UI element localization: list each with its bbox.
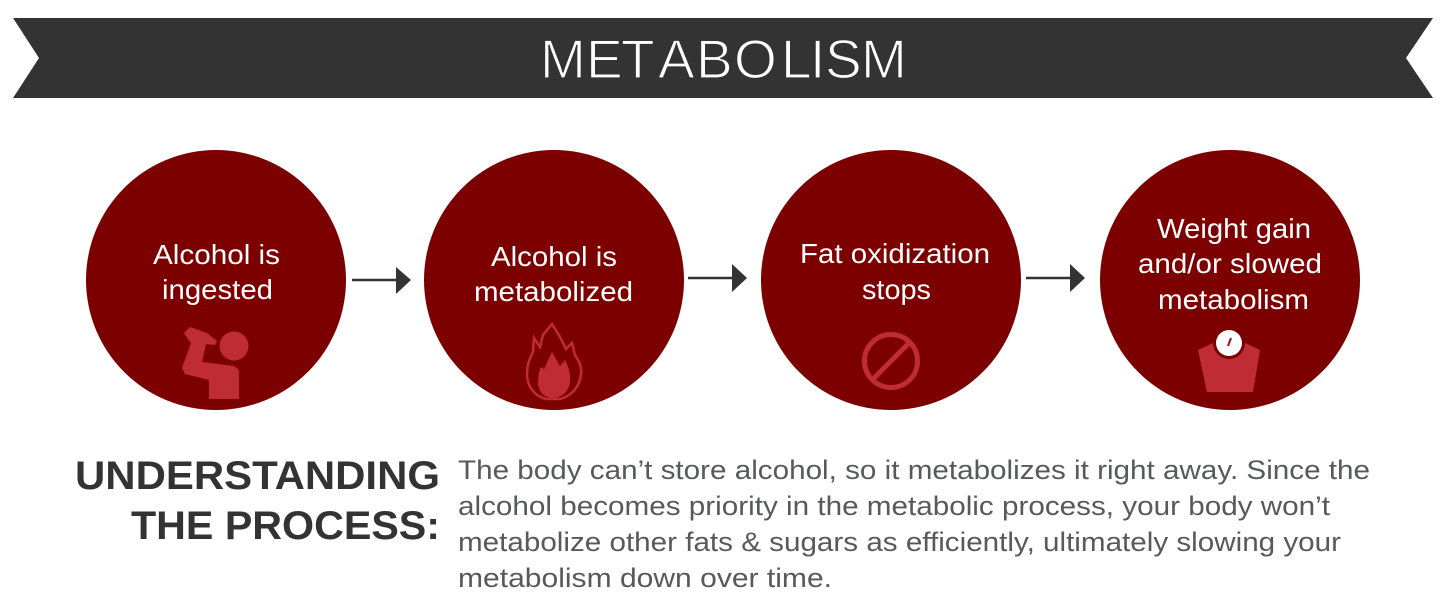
icon: person drinking [182,327,248,399]
explanation text: The body can’t store alcohol, so it metabolizes it right away. Since the [458,455,1370,485]
explanation text [458,455,1370,593]
step 2: alcohol is metabolized: Alcohol is [491,241,617,272]
explanation text: alcohol becomes priority in the metabolic process, your body won’t [458,491,1331,521]
arrow 2 [688,264,747,292]
icon: flame [527,324,581,399]
arrow 1 [352,267,411,294]
explanation text: metabolize other fats & sugars as efficiently, ultimately slowing your [458,527,1341,557]
heading: understanding the process: THE PROCESS: [131,504,440,548]
explanation text: metabolism down over time. [458,563,832,593]
step 2: alcohol is metabolized: metabolized [474,276,633,307]
step 1: alcohol is ingested: ingested [162,274,273,305]
step 4: weight gain and/or slowed metabolism: and/or slowed [1138,248,1322,279]
step 4: weight gain and/or slowed metabolism [1100,150,1360,410]
title banner [13,18,1433,98]
step 1: alcohol is ingested: Alcohol is [153,239,280,270]
step 1: alcohol is ingested [86,150,346,410]
arrow 3 [1026,264,1085,292]
step 4: weight gain and/or slowed metabolism: metabolism [1158,284,1309,315]
step 2: alcohol is metabolized [424,150,684,410]
heading: understanding the process: UNDERSTANDING [75,454,440,498]
step 3: fat oxidization stops: stops [862,274,931,305]
title: METABOLISM [540,28,907,90]
step 3: fat oxidization stops [761,150,1021,410]
step 4: weight gain and/or slowed metabolism: Weight gain [1157,213,1311,244]
heading: understanding the process [75,454,440,548]
icon: prohibition sign [864,334,918,388]
icon: weighing scale [1198,327,1260,392]
step 3: fat oxidization stops: Fat oxidization [800,238,990,269]
